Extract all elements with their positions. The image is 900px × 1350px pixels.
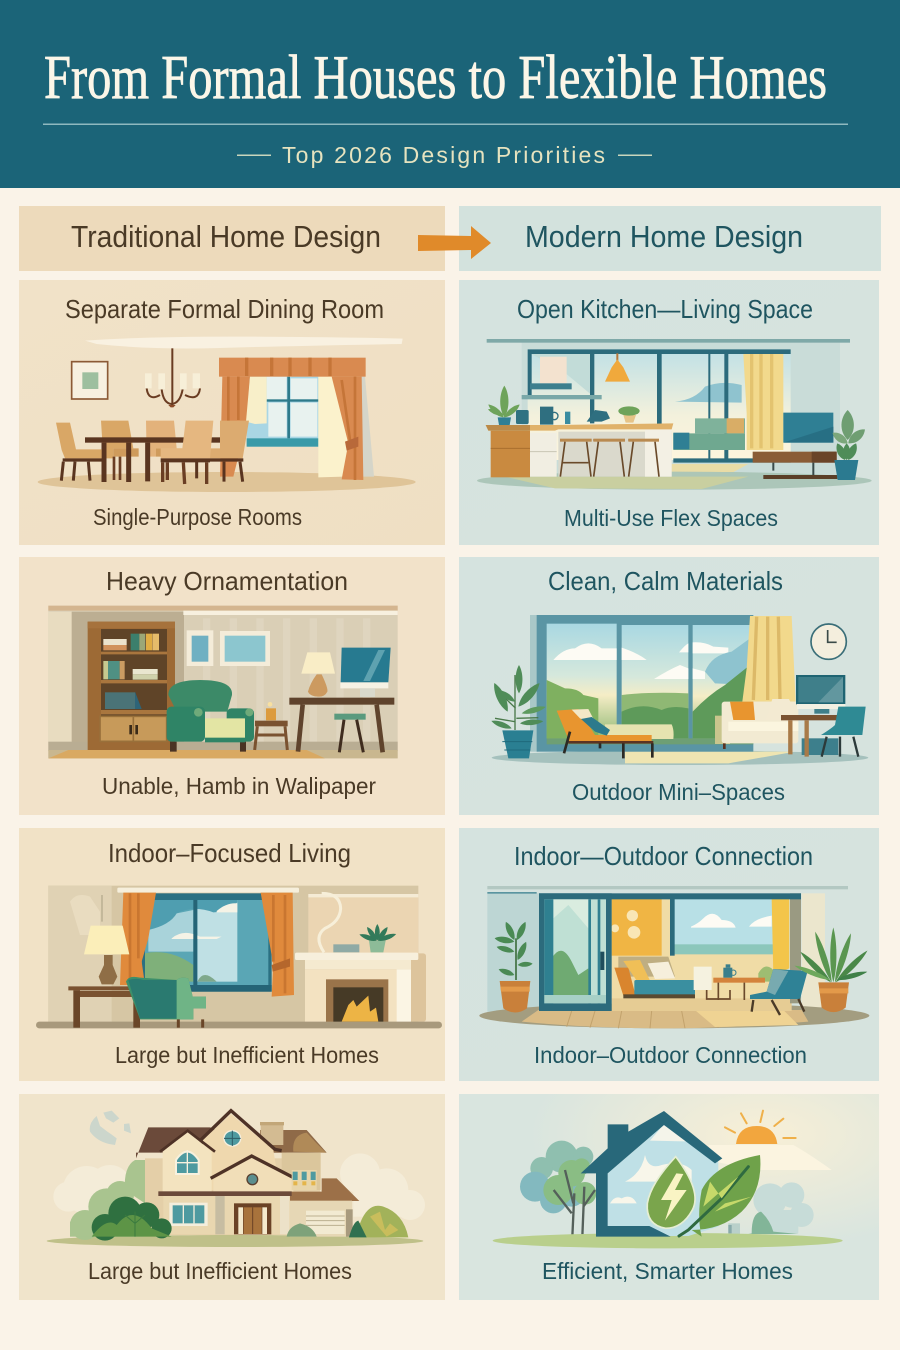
column header: modern (459, 206, 881, 271)
illustration: indoor-outdoor room (479, 886, 870, 1028)
heading: Indoor—Outdoor Connection (514, 841, 813, 871)
heading: Clean, Calm Materials (548, 566, 783, 596)
panel: heavy ornamentation (19, 557, 445, 815)
column header: traditional (19, 206, 445, 271)
panel: open kitchen-living space (459, 280, 879, 545)
heading: Heavy Ornamentation (106, 566, 348, 596)
panel: clean, calm materials (459, 557, 879, 815)
caption: Indoor–Outdoor Connection (534, 1042, 807, 1068)
illustration: ornate study (48, 606, 398, 758)
illustration: dining room (38, 337, 416, 492)
caption: Large but Inefficient Homes (88, 1258, 352, 1284)
caption: Unable, Hamb in Walipaper (102, 773, 376, 799)
illustration: fireplace room (36, 886, 442, 1028)
arrow: traditional to modern (418, 226, 491, 259)
subtitle: Top 2026 Design Priorities (282, 142, 605, 168)
column header: modern: Modern Home Design (525, 219, 803, 254)
caption: Single-Purpose Rooms (93, 504, 302, 530)
illustration: open kitchen (477, 339, 872, 490)
caption: Outdoor Mini–Spaces (572, 779, 785, 805)
panel: indoor-outdoor connection (459, 828, 879, 1081)
caption: Efficient, Smarter Homes (542, 1258, 793, 1284)
illustration: efficient house with leaf (493, 1111, 843, 1248)
heading: Separate Formal Dining Room (65, 294, 384, 324)
caption: Large but Inefficient Homes (115, 1042, 379, 1068)
illustration: large suburban house (47, 1111, 425, 1247)
icon: sun (725, 1111, 796, 1144)
panel: separate formal dining room (19, 280, 445, 545)
illustration: calm living room (490, 615, 868, 765)
heading: Indoor–Focused Living (108, 838, 351, 868)
column header: traditional: Traditional Home Design (71, 219, 381, 254)
heading: Open Kitchen—Living Space (517, 294, 813, 324)
panel: efficient, smarter homes (459, 1094, 879, 1300)
caption: Multi-Use Flex Spaces (564, 505, 778, 531)
panel: large inefficient house (19, 1094, 445, 1300)
panel: indoor-focused living (19, 828, 445, 1081)
header banner (0, 0, 900, 188)
